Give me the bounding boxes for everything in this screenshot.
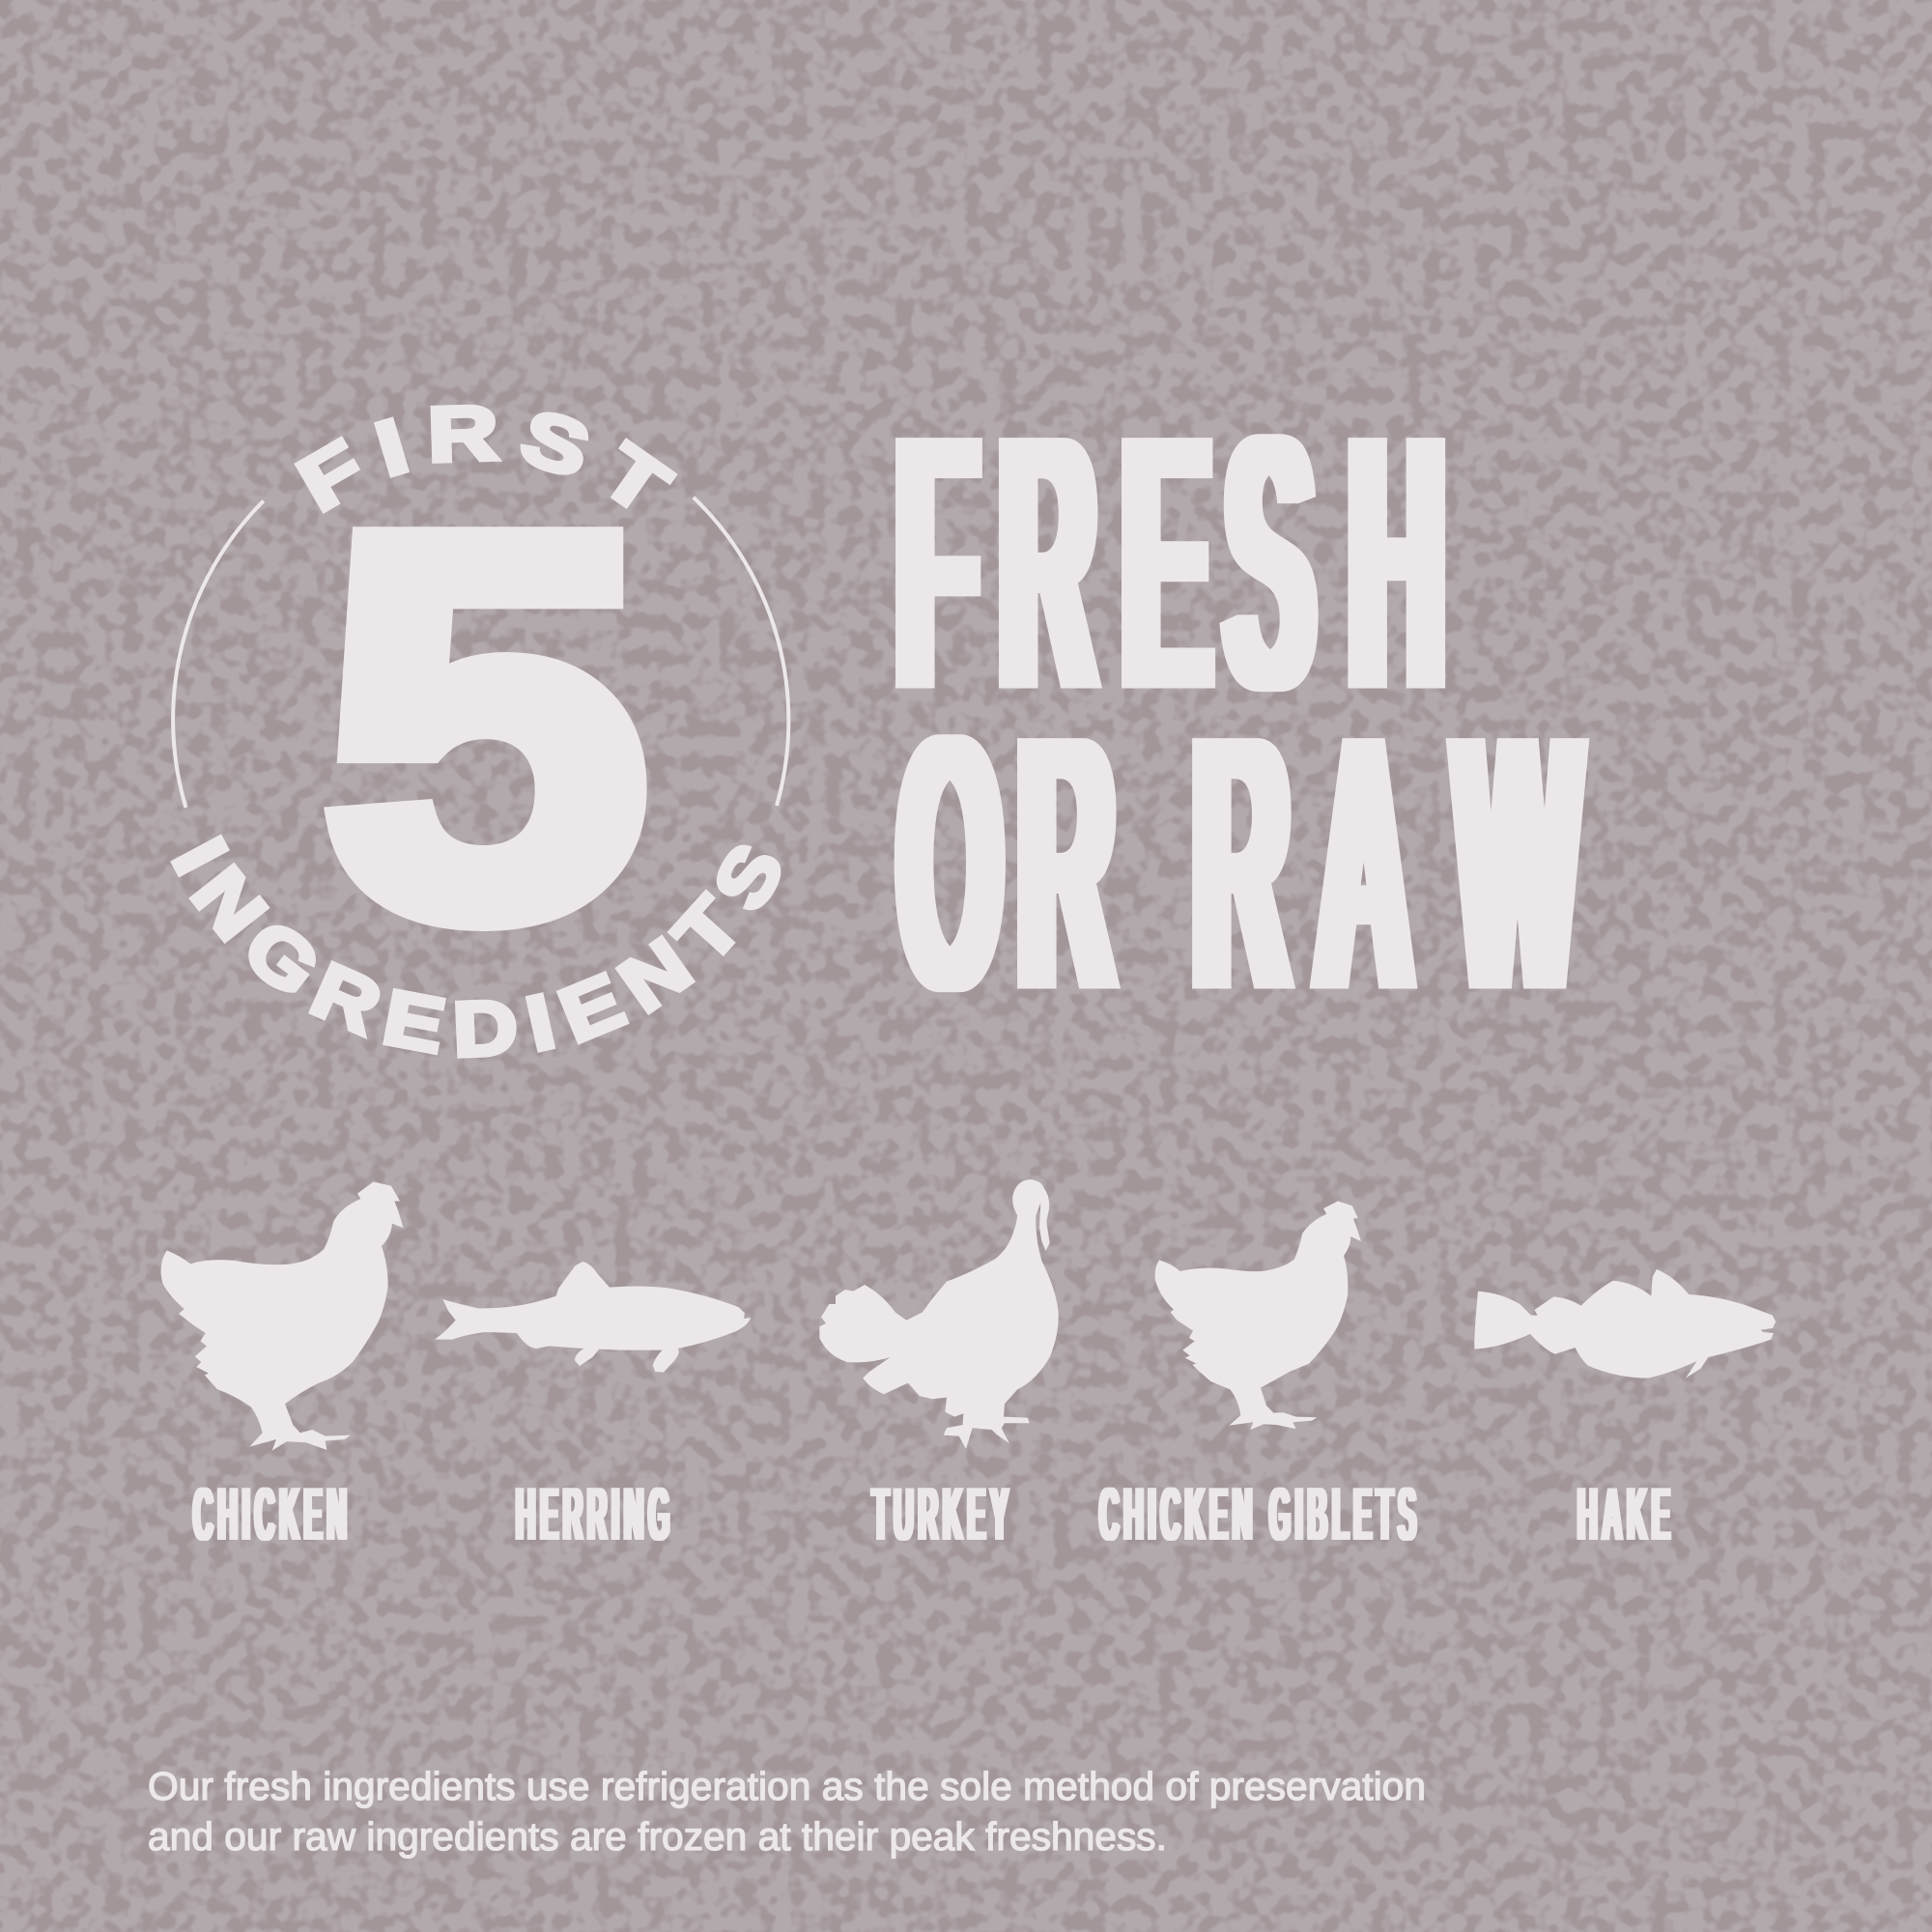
text: HAKE [1577,1471,1675,1556]
badge text: FIRST: FIRST [294,404,678,514]
ingredient labels: CHICKEN [193,1471,352,1556]
icon: hake [1474,1269,1776,1378]
paragraph line 1: Our fresh ingredients use refrigeration as the sole method of preservation [148,1764,1426,1808]
paragraph line 2: and our raw ingredients are frozen at their peak freshness. [148,1814,1167,1859]
ingredient labels: TURKEY [872,1471,1013,1556]
badge text: INGREDIENTS: INGREDIENTS [170,835,781,1059]
badge ring [173,497,788,808]
headline line: OR RAW: OR RAW [899,661,1580,1067]
badge numeral: 5: 5 [323,423,648,1027]
icon: chicken giblets [1155,1201,1361,1430]
icon: turkey [819,1179,1059,1449]
body paragraph [148,1764,1426,1859]
badge: first 5 ingredients [170,404,790,1059]
ingredient labels [193,1471,1675,1556]
headline line: FRESH: FRESH [896,360,1444,767]
icon: chicken [161,1181,403,1451]
icon: herring [435,1262,751,1373]
headline: fresh or raw [896,360,1580,1067]
ingredient labels: HERRING [516,1471,674,1556]
